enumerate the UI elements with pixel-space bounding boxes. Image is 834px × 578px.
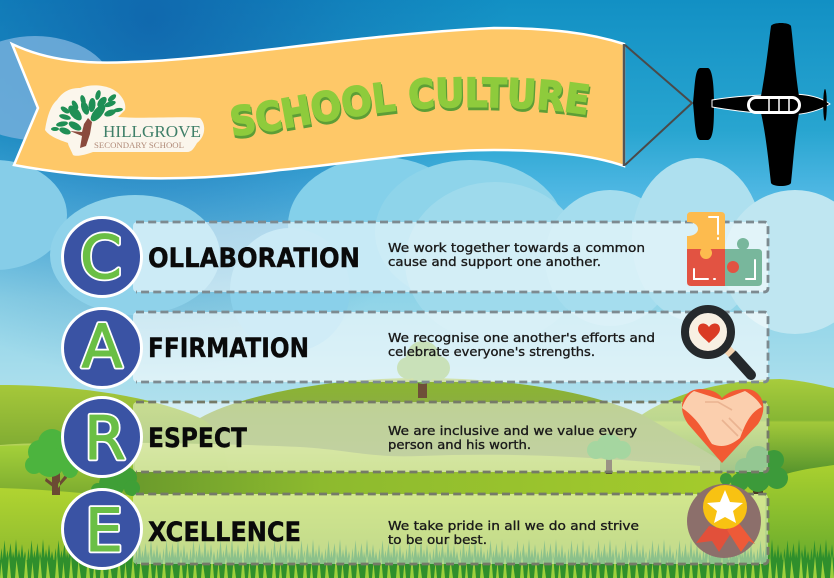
badge: A: A (81, 312, 123, 382)
trees (25, 341, 788, 497)
logo: Hillgrove Secondary School: HILLGROVE (103, 122, 201, 141)
panel: respect (133, 402, 768, 472)
heading: excellence: XCELLENCE (148, 517, 301, 548)
tree: centre (397, 341, 450, 398)
text: affirmation (388, 330, 655, 359)
text: excellence (388, 518, 639, 547)
badge: E: E (85, 496, 123, 566)
icon: airplane (693, 23, 830, 186)
badge: R (62, 398, 142, 476)
panel: excellence (133, 494, 768, 564)
text: excellence: to be our best. (388, 532, 487, 547)
hills (0, 378, 834, 578)
badge: R: R (84, 404, 126, 474)
background sky (0, 0, 834, 440)
heading: affirmation: FFIRMATION (148, 333, 309, 364)
icon: magnifier (685, 309, 751, 375)
text: collaboration: cause and support one another. (388, 254, 601, 269)
logo: Hillgrove Secondary School: SECONDARY SCHOOL (94, 141, 184, 150)
badge: C: C (80, 223, 122, 293)
icon: medal (687, 484, 761, 558)
badge: A: A (81, 312, 123, 382)
banner pole (623, 44, 625, 166)
logo: Hillgrove Secondary School (45, 85, 204, 156)
text: affirmation: celebrate everyone's strengths. (388, 344, 595, 359)
panel: affirmation (133, 312, 768, 382)
text: collaboration (388, 240, 645, 269)
heading: respect: ESPECT (148, 423, 248, 454)
badge: R: R (84, 404, 126, 474)
tree: small (587, 434, 631, 474)
icon: handshake heart (682, 389, 763, 463)
badge: E: E (85, 496, 123, 566)
icon: puzzle (687, 212, 762, 286)
clouds (0, 36, 834, 352)
title: School Culture: SCHOOL CULTURE (231, 76, 590, 136)
banner ropes (625, 45, 692, 165)
heading: collaboration: OLLABORATION (148, 243, 360, 274)
text: collaboration: We work together towards a common (388, 240, 645, 255)
tree: left (25, 429, 140, 497)
badge: E (62, 490, 142, 568)
panel: collaboration (133, 222, 768, 292)
banner (12, 28, 692, 178)
badge: C: C (80, 223, 122, 293)
text: respect (388, 423, 638, 452)
grass (0, 538, 834, 578)
title: School Culture: SCHOOL CULTURE (232, 79, 590, 139)
tree: right (720, 446, 788, 494)
badge: A (62, 308, 142, 388)
text: respect: We are inclusive and we value every (388, 423, 638, 438)
text: respect: person and his worth. (388, 437, 531, 452)
text: excellence: We take pride in all we do and strive (388, 518, 639, 533)
text: affirmation: We recognise one another's efforts and (388, 330, 655, 345)
badge: C (62, 218, 142, 296)
